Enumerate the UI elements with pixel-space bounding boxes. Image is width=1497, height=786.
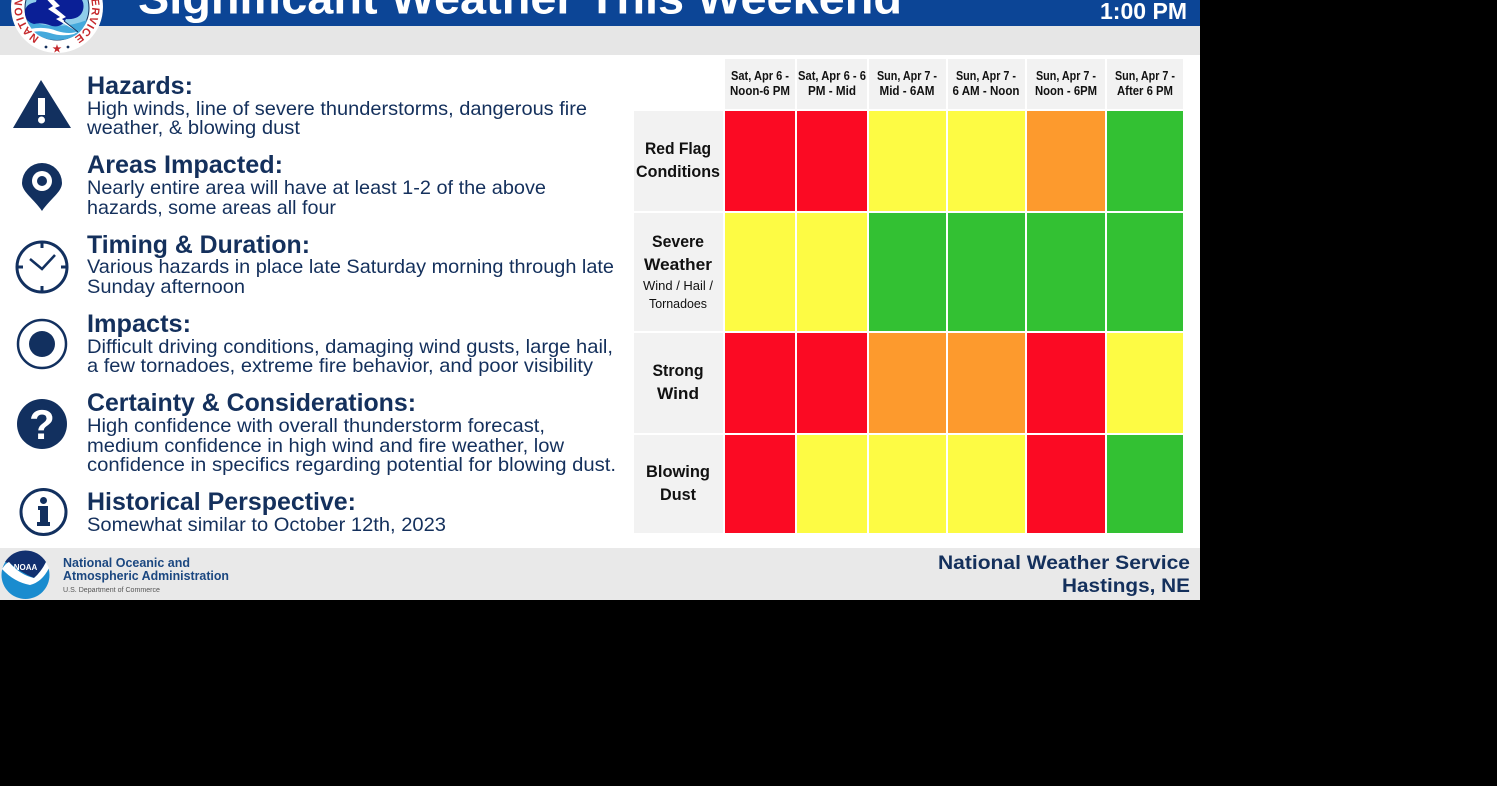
heading: areas impacted: Areas Impacted:: [87, 151, 283, 179]
text: certainty detail: confidence in specifics regarding potential for blowing dust.: [87, 454, 616, 476]
footer: [0, 548, 1200, 600]
text: historical detail: Somewhat similar to October 12th, 2023: [87, 514, 446, 536]
text: impacts detail: a few tornadoes, extreme fire behavior, and poor visibility: [87, 355, 593, 377]
row: severe weather: Tornadoes: [649, 297, 707, 311]
text: hazards detail: weather, & blowing dust: [86, 117, 301, 139]
panel: impacts: [18, 310, 613, 377]
column headers: Sun, Apr 7 -: [877, 69, 937, 83]
row: red flag conditions: Red Flag: [645, 139, 711, 158]
icon: map pin: [22, 163, 62, 211]
panel: hazards: [13, 72, 587, 139]
text: certainty detail: High confidence with overall thunderstorm forecast,: [87, 415, 545, 437]
row: red flag conditions: [634, 111, 1183, 211]
text: timing detail: Sunday afternoon: [87, 276, 245, 298]
icon: warning triangle: [13, 80, 71, 128]
column headers: Sun, Apr 7 -: [1036, 69, 1096, 83]
text: areas detail: hazards, some areas all four: [87, 197, 337, 219]
column headers: Sat, Apr 6 -: [731, 69, 789, 83]
icon: clock: [17, 242, 67, 292]
icon: NOAA logo: NOAA: [14, 563, 37, 572]
row: red flag conditions: Conditions: [636, 162, 720, 181]
heading: hazards: Hazards:: [87, 72, 193, 100]
icon: NOAA logo: [2, 550, 50, 599]
text: National Weather Service Hastings: National Weather Service: [938, 552, 1190, 574]
text: certainty detail: medium confidence in high wind and fire weather, low: [87, 435, 565, 457]
column headers: Sat, Apr 6 - 6: [798, 69, 866, 83]
icon: question mark: [17, 399, 67, 449]
row: strong wind: Strong: [652, 361, 704, 380]
column headers: 6 AM - Noon: [952, 84, 1020, 98]
column headers: Mid - 6AM: [880, 84, 934, 98]
panel: certainty and considerations: [17, 389, 616, 476]
header banner: [0, 0, 1200, 55]
heading: historical perspective: Historical Perspective:: [87, 488, 356, 516]
row: blowing dust: Blowing: [646, 462, 710, 481]
text: hazards detail: High winds, line of severe thunderstorms, dangerous fire: [87, 98, 587, 120]
text: National Weather Service Hastings: Hastings, NE: [1062, 575, 1190, 597]
row: strong wind: [634, 333, 1183, 433]
column headers: After 6 PM: [1117, 84, 1173, 98]
text: impacts detail: Difficult driving conditions, damaging wind gusts, large hail,: [87, 336, 613, 358]
text: timing detail: Various hazards in place late Saturday morning through late: [87, 256, 614, 278]
panel: timing and duration: [17, 231, 614, 298]
row: strong wind: Wind: [657, 384, 699, 403]
panel: historical perspective: [21, 488, 446, 536]
row: severe weather: [634, 213, 1183, 331]
text: areas detail: Nearly entire area will have at least 1-2 of the above: [87, 177, 546, 199]
threat matrix chart: [634, 59, 1183, 533]
icon: question mark: ?: [29, 401, 55, 448]
row: severe weather: Weather: [644, 255, 712, 274]
text: department of commerce: U.S. Department of Commerce: [63, 587, 160, 594]
column headers: Noon-6 PM: [730, 84, 790, 98]
heading: certainty and considerations: Certainty & Considerations:: [87, 389, 416, 417]
icon: information: [21, 490, 66, 534]
text: NOAA name: National Oceanic and: [63, 556, 190, 570]
heading: impacts: Impacts:: [87, 310, 191, 338]
row: severe weather: Severe: [652, 232, 704, 251]
row: blowing dust: [634, 435, 1183, 533]
icon: National Weather Service logo: ★: [53, 44, 62, 55]
column headers: Sun, Apr 7 -: [1115, 69, 1175, 83]
column headers: Noon - 6PM: [1035, 84, 1097, 98]
row: severe weather: Wind / Hail /: [643, 279, 714, 293]
heading: timing and duration: Timing & Duration:: [87, 231, 310, 259]
row: blowing dust: Dust: [660, 485, 696, 504]
column headers: [725, 59, 1183, 109]
icon: target: [18, 320, 66, 368]
column headers: PM - Mid: [808, 84, 856, 98]
panel: areas impacted: [22, 151, 546, 219]
column headers: Sun, Apr 7 -: [956, 69, 1016, 83]
text: NOAA name: Atmospheric Administration: [63, 569, 229, 583]
